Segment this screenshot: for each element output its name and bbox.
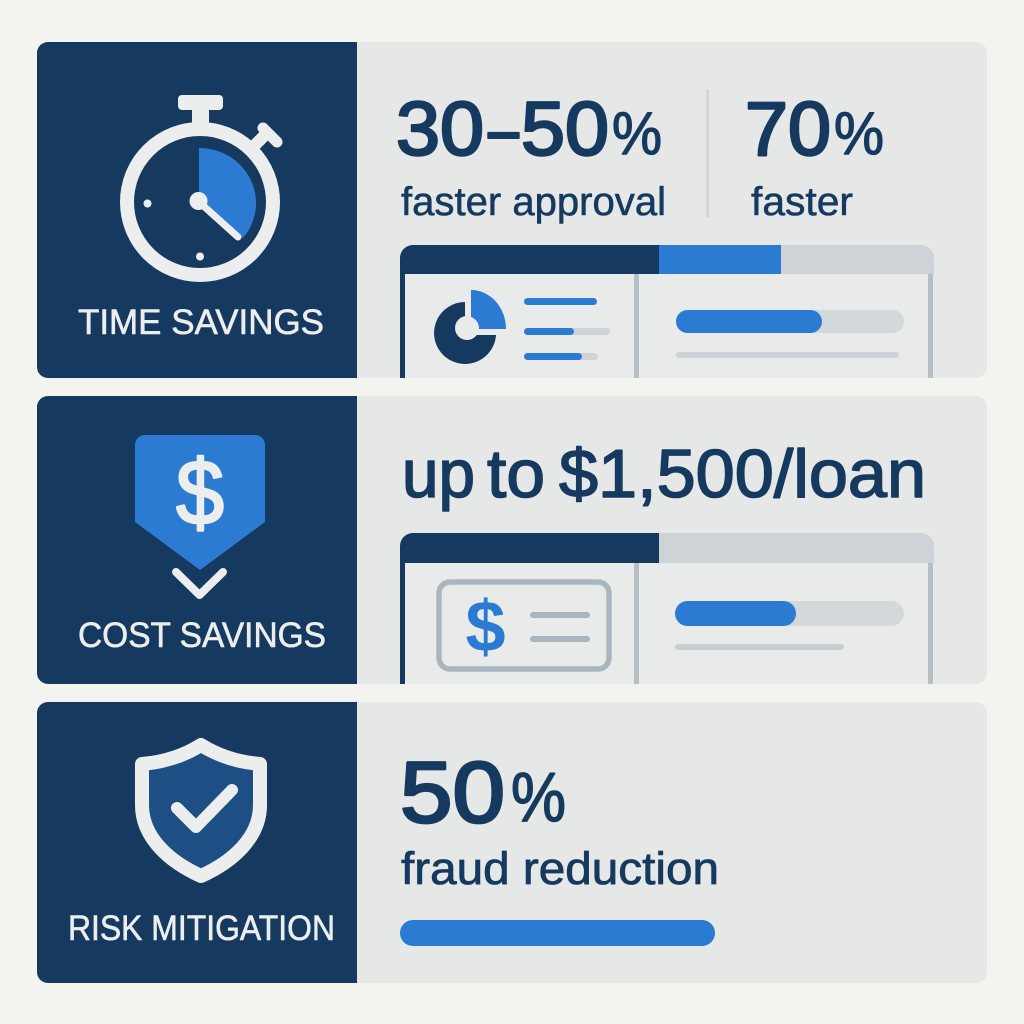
heading: cost savings: COST SAVINGS (78, 616, 326, 655)
panel: cost savings (37, 396, 987, 684)
dashboard mockup: cost (400, 533, 934, 684)
dashboard mockup: time (400, 245, 934, 378)
pie chart (434, 290, 506, 364)
payment card: $ (465, 587, 506, 667)
icon: dollar shield with chevron (135, 435, 265, 595)
stat: 50% fraud reduction: fraud reduction (401, 843, 719, 894)
stat: 50% fraud reduction: % (511, 758, 566, 836)
stat: up to $1,500/loan: to (487, 436, 545, 512)
stat: 30-50% faster approval: – (488, 87, 520, 172)
progress bar (400, 920, 715, 946)
panel: risk mitigation (37, 702, 987, 983)
panel: time savings (37, 42, 987, 378)
icon: shield check (142, 745, 260, 876)
stat: 70% faster: 70 (745, 87, 831, 172)
stat: 30-50% faster approval: % (612, 100, 662, 167)
icon: stopwatch (127, 95, 277, 275)
stat: 30-50% faster approval: faster approval (401, 180, 666, 224)
stat: up to $1,500/loan: $1,500/loan (559, 436, 926, 512)
heading: risk mitigation: RISK MITIGATION (68, 909, 335, 948)
stat: 50% fraud reduction: 50 (400, 745, 505, 841)
stat: 30-50% faster approval (396, 87, 666, 224)
payment card (439, 582, 609, 669)
stat: 50% fraud reduction (400, 745, 719, 894)
icon: dollar shield with chevron: $ (176, 442, 224, 544)
stat: up to $1,500/loan: up (402, 436, 475, 512)
stat: 70% faster: faster (751, 180, 853, 224)
stat: 30-50% faster approval: 50 (521, 87, 609, 172)
stat: up to $1,500/loan (402, 436, 926, 512)
heading: time savings: TIME SAVINGS (78, 303, 324, 342)
stat: 70% faster: % (834, 100, 884, 167)
stat: 30-50% faster approval: 30 (396, 87, 484, 172)
stat: 70% faster (745, 87, 884, 224)
